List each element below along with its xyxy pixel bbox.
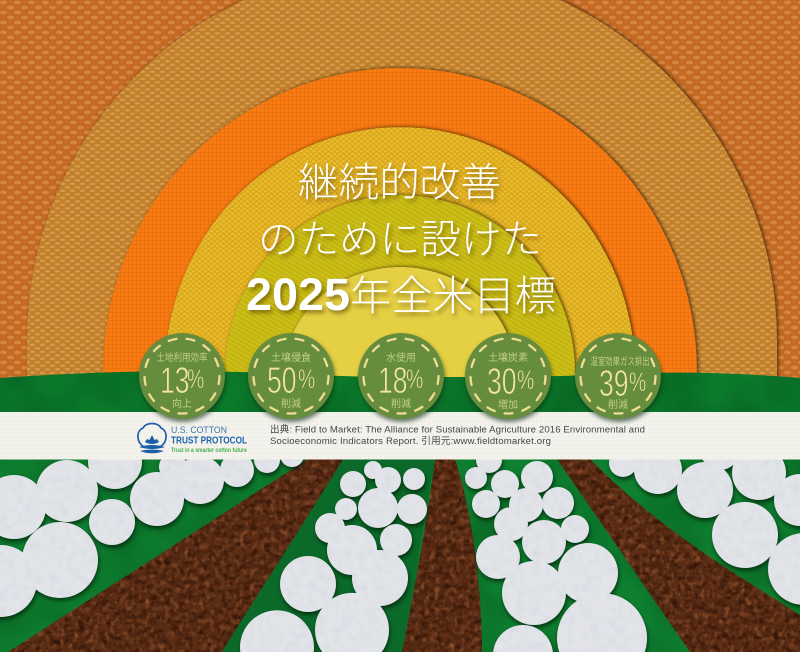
crop field	[0, 430, 800, 652]
title: 継続的改善	[298, 150, 501, 208]
arc: bright orange	[103, 68, 697, 412]
goal badge: soil erosion: 削減	[281, 395, 301, 410]
goal badge: soil carbon: %	[517, 365, 534, 395]
arc: golden yellow	[165, 127, 635, 412]
arc: tan canvas	[27, 0, 777, 412]
darker green row	[222, 459, 435, 652]
goal badge: greenhouse gas emissions: 温室効果ガス排出	[590, 353, 650, 368]
goal badge: water use: 水使用	[386, 349, 416, 364]
goal badge: land use efficiency: %	[187, 364, 204, 394]
title: 2025	[246, 269, 350, 320]
source citation: 出典: Field to Market: The Alliance for Sustainable Agriculture 2016 Environmental and	[270, 424, 645, 436]
title: のために設けた	[258, 207, 542, 265]
title: 年全米目標	[350, 262, 556, 322]
goal badge: soil erosion	[248, 333, 334, 419]
logo text: Trust in a smarter cotton future	[171, 448, 248, 454]
goal badge: soil erosion: 土壌侵食	[271, 349, 311, 364]
goal badge: soil carbon	[465, 333, 551, 419]
goal badge: soil carbon: 増加	[498, 396, 518, 411]
brown soil furrow: centre	[402, 459, 482, 652]
concentric fabric arcs	[27, 0, 777, 412]
goal badge: soil erosion: 50	[267, 360, 297, 401]
goal badge: greenhouse gas emissions: %	[629, 367, 646, 397]
logo text	[171, 425, 248, 454]
icon: cotton boll	[138, 424, 166, 453]
goal badge: land use efficiency: 13	[160, 360, 190, 401]
logo: U.S. Cotton Trust Protocol	[138, 424, 248, 454]
cotton: centre-right row	[465, 447, 647, 652]
goal badge: greenhouse gas emissions	[575, 333, 661, 419]
goal badge: greenhouse gas emissions: 39	[599, 363, 629, 404]
goal badge: soil carbon: 土壌炭素	[488, 349, 528, 364]
logo text: TRUST PROTOCOL	[171, 436, 247, 446]
goal badge: water use: %	[406, 364, 423, 394]
goal badge: water use: 削減	[391, 395, 411, 410]
arc: pale yellow centre	[285, 267, 515, 412]
source citation: Socioeconomic Indicators Report. 引用元:www.fieldtomarket.org	[270, 436, 551, 447]
goal badge: land use efficiency: 土地利用効率	[156, 349, 208, 364]
goal badge: water use	[358, 333, 444, 419]
brown soil furrow: left	[8, 459, 343, 652]
cotton: far right row	[609, 430, 800, 605]
green rows	[0, 459, 800, 652]
white info band	[0, 412, 800, 460]
cotton: far left row	[0, 435, 304, 617]
title	[246, 150, 556, 322]
source citation	[270, 424, 645, 447]
green horizon field	[0, 371, 800, 414]
arc: olive yellow	[225, 195, 575, 412]
goal badge: soil carbon: 30	[487, 361, 517, 402]
goal badge: greenhouse gas emissions: 削減	[608, 396, 628, 411]
goal badge: land use efficiency: 向上	[172, 395, 192, 410]
cotton: centre-left row	[240, 461, 427, 652]
brown soil furrow: right	[557, 459, 800, 652]
logo text: U.S. COTTON	[171, 425, 227, 435]
cotton rows	[0, 430, 800, 652]
goal badge: land use efficiency	[139, 333, 225, 419]
goal badge: soil erosion: %	[298, 364, 315, 394]
goal badge: water use: 18	[378, 360, 408, 401]
